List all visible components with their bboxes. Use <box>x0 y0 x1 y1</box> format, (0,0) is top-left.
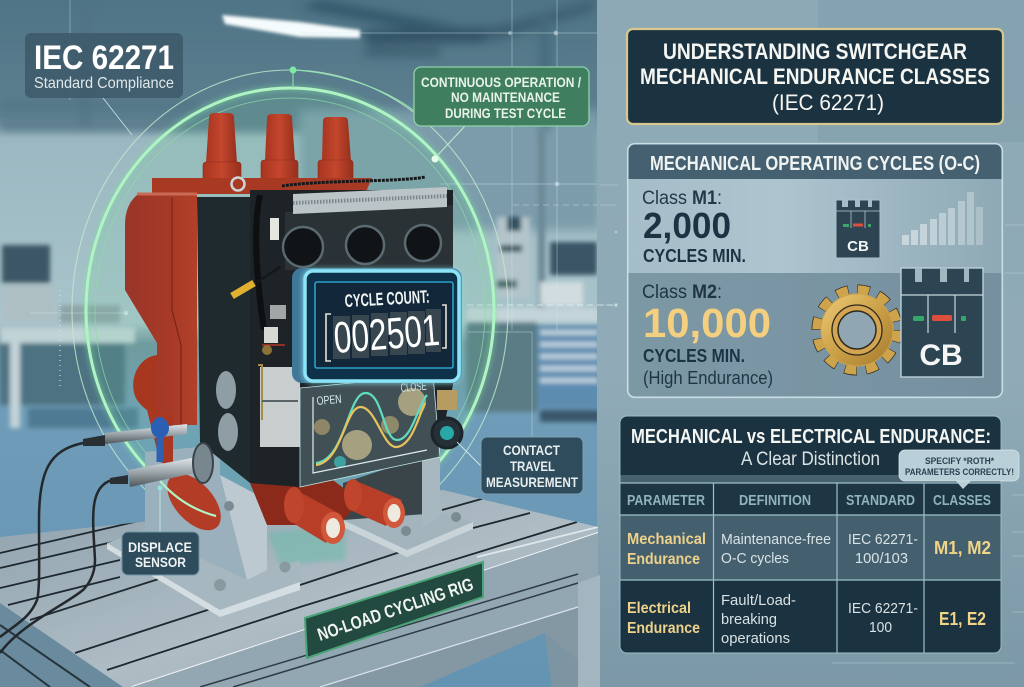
table heading: A Clear Distinction <box>741 449 880 470</box>
table row: electrical endurance <box>620 580 1001 653</box>
callout: contact travel measurement: TRAVEL <box>510 458 555 474</box>
table row: mechanical endurance: IEC 62271- <box>848 531 918 548</box>
label plate: no-load cycling rig: NO-LOAD CYCLING RIG <box>315 574 476 645</box>
right bench <box>538 130 545 310</box>
callout: continuous operation: NO MAINTENANCE <box>451 89 560 105</box>
callout: IEC 62271 standard compliance: Standard Compliance <box>34 75 174 92</box>
graph overlay panel: CLOSE <box>400 379 427 395</box>
cycle counter display <box>292 268 462 383</box>
table header row <box>620 483 1001 515</box>
panel header <box>628 144 1002 179</box>
table row: mechanical endurance: Endurance <box>627 551 700 568</box>
callout: displace sensor <box>122 486 199 575</box>
table row: mechanical endurance <box>620 515 1001 580</box>
table header row: DEFINITION <box>739 492 811 509</box>
callout: IEC 62271 standard compliance <box>25 33 183 135</box>
label plate: no-load cycling rig <box>305 562 483 658</box>
table row: mechanical endurance: Maintenance-free <box>721 531 831 548</box>
callout: displace sensor: SENSOR <box>135 554 186 570</box>
displacement sensors and cables <box>0 417 213 653</box>
callout: specify both parameters <box>899 450 1019 489</box>
red housing <box>125 178 372 467</box>
metal test table <box>0 490 600 687</box>
callout: continuous operation <box>414 67 589 162</box>
left bench <box>0 327 135 343</box>
table row: electrical endurance: E1, E2 <box>939 609 986 629</box>
panel: mechanical operating cycles <box>627 143 1003 398</box>
table row: mechanical endurance: Mechanical <box>627 531 706 548</box>
class M2 row <box>628 273 1002 397</box>
callout: continuous operation: DURING TEST CYCLE <box>445 105 566 121</box>
table row: electrical endurance: breaking <box>721 611 777 628</box>
callout: displace sensor: DISPLACE <box>128 539 192 555</box>
callout: contact travel measurement <box>457 437 583 494</box>
class M2 row: 10,000 <box>643 300 771 346</box>
table frame <box>320 607 578 687</box>
right panel background <box>467 0 1024 687</box>
class M1 row: CYCLES MIN. <box>643 246 746 266</box>
class M2 row: CYCLES MIN. <box>643 346 745 366</box>
title banner <box>627 29 1003 124</box>
green glowing rings <box>72 66 508 550</box>
panel: mechanical vs electrical comparison table <box>620 416 1019 653</box>
class M1 row: Class M1: <box>642 188 722 209</box>
lab background scene <box>0 0 600 687</box>
table row: electrical endurance: 100 <box>869 619 892 636</box>
graph overlay panel <box>300 375 462 487</box>
table row: mechanical endurance: O-C cycles <box>721 550 789 567</box>
cycle counter display: 002501 <box>332 306 441 363</box>
table row: mechanical endurance: 100/103 <box>855 550 908 567</box>
right mounting bracket <box>343 448 473 557</box>
lower bushings <box>250 478 405 544</box>
class M1 row <box>628 179 1002 273</box>
icon: small circuit breaker: CB <box>847 238 869 255</box>
black side panel <box>197 197 250 483</box>
dial gauges <box>283 225 441 267</box>
icon: large circuit breaker <box>901 268 983 377</box>
table row: electrical endurance: operations <box>721 630 790 647</box>
icon: small circuit breaker <box>836 200 880 258</box>
chart: rising bars <box>902 192 983 245</box>
switchgear machine <box>107 113 473 617</box>
cycle counter display: CYCLE COUNT: <box>344 287 430 311</box>
ceiling light <box>222 15 360 38</box>
table row: electrical endurance: Fault/Load- <box>721 592 796 609</box>
front control panel <box>232 190 453 487</box>
table row: electrical endurance: IEC 62271- <box>848 600 918 617</box>
callout: continuous operation: CONTINUOUS OPERATION / <box>421 74 581 90</box>
top insulators <box>203 113 353 192</box>
table header row: STANDARD <box>846 492 915 509</box>
table header row: CLASSES <box>933 492 991 509</box>
graph overlay panel: OPEN <box>316 392 342 408</box>
callout: contact travel measurement: CONTACT <box>503 442 560 458</box>
table row: electrical endurance: Endurance <box>627 620 700 637</box>
class M1 row: 2,000 <box>643 205 731 246</box>
icon: large circuit breaker: CB <box>919 339 963 372</box>
callout: contact travel measurement: MEASUREMENT <box>486 474 578 490</box>
title banner: (IEC 62271) <box>772 90 884 115</box>
table row: electrical endurance: Electrical <box>627 600 691 617</box>
callout: IEC 62271 standard compliance: IEC 62271 <box>34 39 174 77</box>
table heading <box>631 426 991 470</box>
left mounting bracket <box>107 445 300 617</box>
icon: gold gear <box>819 292 895 368</box>
class M2 row: (High Endurance) <box>643 368 773 388</box>
table row: mechanical endurance: M1, M2 <box>934 538 991 558</box>
HUD grid lines <box>30 0 600 437</box>
title banner: UNDERSTANDING SWITCHGEAR <box>663 39 967 64</box>
terminal rail <box>282 177 447 214</box>
class M2 row: Class M2: <box>642 282 722 303</box>
table header row: PARAMETER <box>627 492 705 509</box>
callout: specify both parameters: SPECIFY *ROTH* <box>925 456 994 467</box>
